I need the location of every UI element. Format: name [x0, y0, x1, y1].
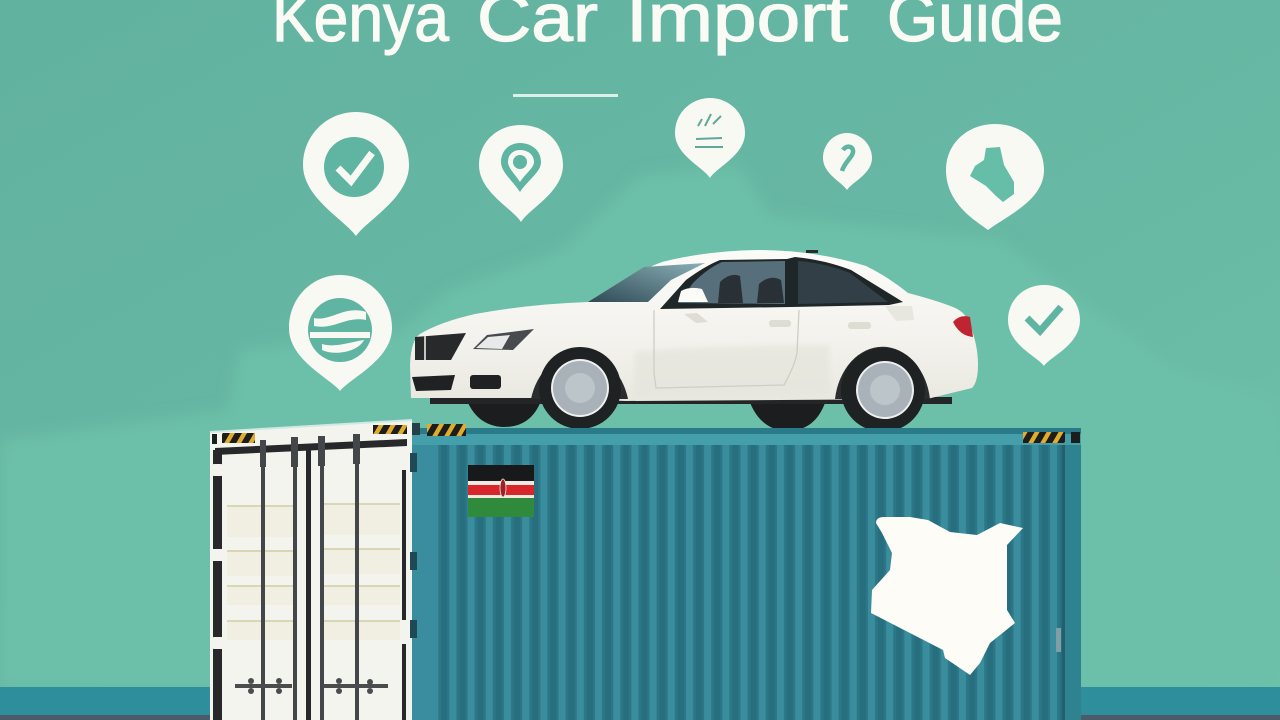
- title underline: [513, 94, 618, 97]
- side windows: [660, 257, 903, 309]
- door rib edges: [227, 503, 400, 622]
- title: [272, 0, 1063, 56]
- grille: [415, 333, 466, 360]
- door rods: [260, 434, 360, 720]
- front intakes: [412, 375, 501, 391]
- latch: [1056, 628, 1061, 652]
- Kenya flag: [468, 465, 534, 517]
- door handles: [684, 306, 914, 329]
- icon: map pin: [946, 124, 1044, 230]
- icon: papers pin: [289, 275, 392, 391]
- ground band: [0, 687, 1280, 720]
- front wheel: [531, 347, 628, 429]
- hazard stripes: [412, 423, 1080, 443]
- icon: check pin small: [1008, 285, 1080, 366]
- icon: question pin: [823, 133, 872, 190]
- container side: [412, 428, 1081, 720]
- underbody: [430, 397, 952, 404]
- headlight: [473, 329, 534, 350]
- icon: location pin: [479, 125, 563, 222]
- roof antenna: [806, 250, 818, 253]
- mirror: [678, 288, 708, 302]
- Kenya map: [871, 517, 1023, 675]
- lower body shading: [634, 345, 830, 397]
- door rib panels: [227, 503, 400, 640]
- icon: check pin: [303, 112, 409, 236]
- door hinges: [211, 453, 417, 649]
- icon: document pin: [675, 98, 745, 178]
- door hazard stripes: [212, 425, 407, 444]
- door handles: [235, 678, 388, 694]
- far wheels: [466, 398, 826, 431]
- windshield: [588, 263, 705, 302]
- car body: [410, 250, 978, 401]
- door frame: [213, 439, 407, 720]
- container: [210, 420, 1081, 720]
- container doors: [210, 420, 417, 720]
- door lines: [654, 310, 799, 388]
- rear wheel: [835, 347, 930, 432]
- car: [410, 250, 978, 432]
- tail light: [953, 316, 973, 337]
